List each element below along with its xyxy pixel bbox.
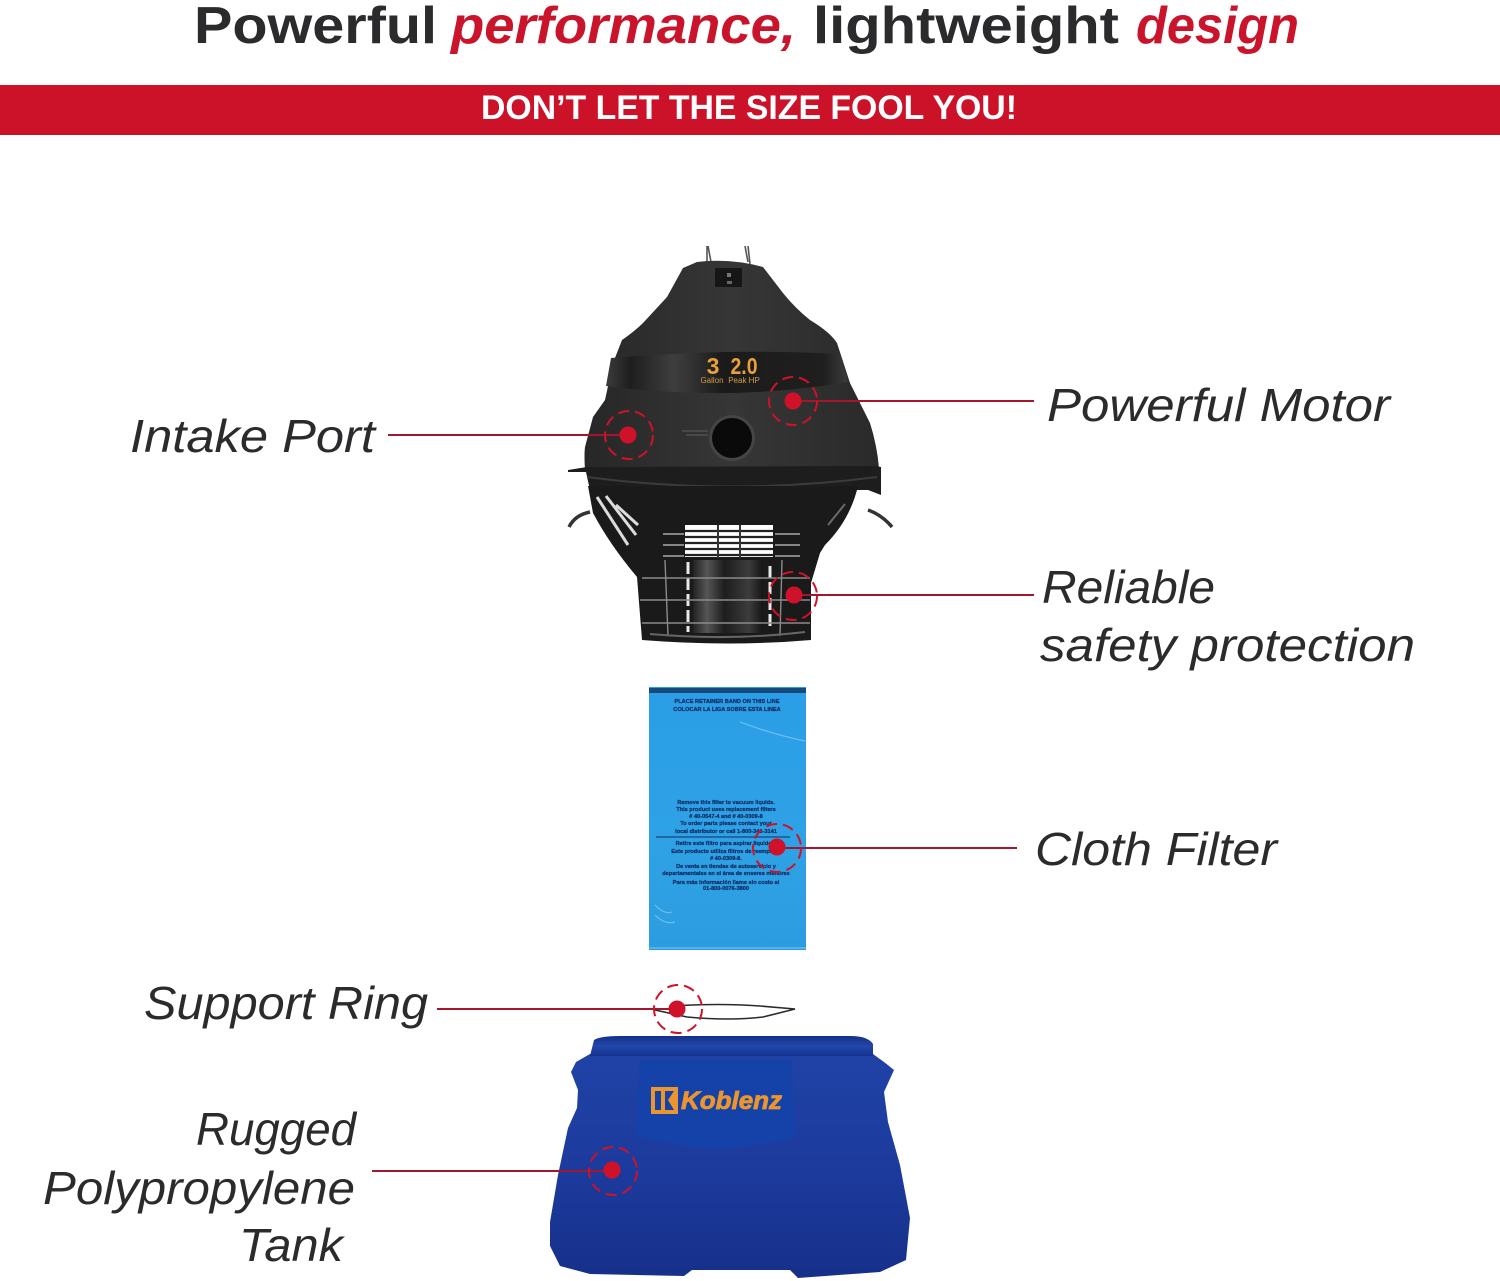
cloth filter — [649, 687, 806, 950]
banner — [0, 85, 1500, 135]
icon: top handles — [707, 246, 750, 264]
motor head — [568, 246, 892, 644]
banner: DON’T LET THE SIZE FOOL YOU! — [481, 89, 1017, 127]
switch — [715, 268, 742, 287]
filter printed text: PLACE RETAINER BAND ON THIS LINE — [675, 699, 780, 705]
callout: reliable safety protection: Reliable — [1042, 561, 1215, 613]
tank rim — [590, 1036, 873, 1056]
filter printed text: Remove this filter to vacuum liquids. — [677, 800, 775, 806]
filter printed text: COLOCAR LA LIGA SOBRE ESTA LINEA — [673, 707, 781, 713]
callout: rugged polypropylene tank — [43, 1103, 637, 1271]
title — [194, 0, 1299, 55]
callout: rugged polypropylene tank: Polypropylene — [43, 1162, 355, 1214]
cage — [588, 486, 858, 644]
filter printed text: Para más información llame sin costo al — [673, 880, 780, 886]
spec text: 3 — [707, 353, 719, 379]
filter printed text: To order parts please contact your — [680, 821, 773, 827]
filter printed text: local distributor or call 1-800-346-3141 — [675, 829, 777, 835]
filter printed text: # 40-0547-4 and # 40-0309-8 — [689, 814, 763, 820]
flange — [568, 466, 881, 495]
filter printed text: # 40-0309-8. — [710, 856, 742, 862]
filter printed text: Este producto utiliza filtros de reemplazo — [671, 849, 781, 855]
filter printed text: This product uses replacement filters — [676, 807, 776, 813]
callout: support ring: Support Ring — [144, 977, 428, 1029]
logo: Koblenz — [681, 1087, 783, 1115]
filter cylinder — [693, 560, 763, 633]
filter printed text: departamentales en el área de enseres menores — [662, 871, 790, 877]
filter printed text — [662, 699, 790, 892]
spec text — [700, 353, 760, 385]
wire grid — [640, 560, 810, 636]
filter printed text: 01-800-0076-3800 — [703, 886, 749, 892]
spec text: Peak HP — [728, 376, 760, 385]
spec text: Gallon — [700, 376, 724, 385]
intake hole — [682, 415, 755, 461]
opening — [685, 525, 773, 558]
filter printed text: Retire este filtro para aspirar liquidos. — [676, 841, 777, 847]
label panel — [636, 1060, 795, 1148]
dome — [584, 261, 879, 470]
filter printed text: De venta en tiendas de autoservicio y — [676, 864, 777, 870]
callout: reliable safety protection: safety protection — [1040, 619, 1415, 671]
callout: powerful motor: Powerful Motor — [1047, 379, 1392, 431]
callout: reliable safety protection — [769, 561, 1415, 671]
spec text: 2.0 — [730, 353, 758, 379]
display band — [606, 352, 848, 393]
callout: rugged polypropylene tank: Rugged — [196, 1103, 357, 1155]
vents — [597, 496, 638, 545]
callout: cloth filter — [753, 823, 1279, 875]
callout: intake port: Intake Port — [130, 410, 377, 462]
callout: support ring — [144, 977, 702, 1033]
tank — [550, 1036, 910, 1278]
support ring — [655, 1004, 795, 1019]
callout: rugged polypropylene tank: Tank — [239, 1219, 345, 1271]
callout: intake port — [130, 410, 653, 462]
hooks — [569, 510, 892, 527]
callout: powerful motor — [769, 377, 1392, 431]
callout: cloth filter: Cloth Filter — [1035, 823, 1279, 875]
